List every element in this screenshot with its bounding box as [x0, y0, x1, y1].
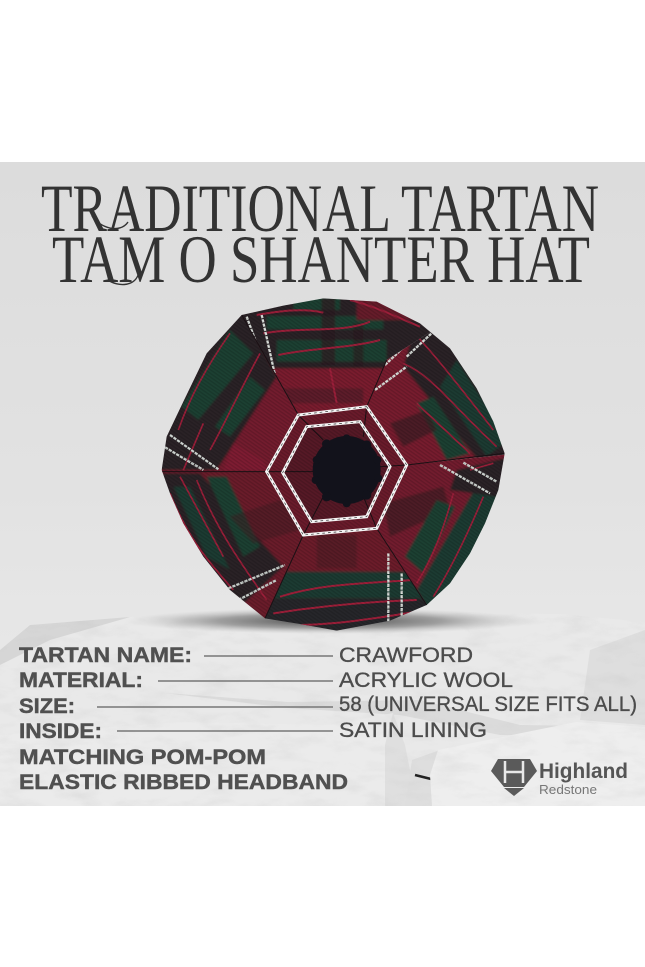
spec: size: 58 (UNIVERSAL SIZE FITS ALL): [339, 693, 637, 716]
panel: right: [368, 332, 505, 464]
panel: upper left: [162, 315, 298, 472]
title: [41, 170, 599, 297]
panel: lower left: [162, 472, 302, 618]
spec list: [19, 644, 637, 794]
infographic canvas: [0, 162, 645, 806]
spec: material: ACRYLIC WOOL: [339, 669, 513, 692]
spec: tartan name: TARTAN NAME:: [19, 644, 192, 667]
hexagon trim: [267, 407, 407, 535]
spec: tartan name: CRAWFORD: [339, 644, 473, 667]
logo: Highland Redstone: Highland: [539, 760, 628, 783]
background panel: [0, 162, 645, 806]
icon: diamond: [491, 759, 537, 796]
feature: pom-pom: MATCHING POM-POM: [19, 746, 266, 769]
spec: size: [19, 693, 637, 718]
panel: bottom: [265, 530, 426, 631]
seams: [162, 315, 504, 618]
logo: Highland Redstone: Redstone: [539, 782, 597, 797]
spec: size: SIZE:: [19, 695, 75, 718]
hat: tartan tam o shanter: [162, 298, 505, 631]
spec: inside: SATIN LINING: [339, 719, 487, 742]
spec: inside: [19, 719, 487, 743]
spec: tartan name: [19, 644, 473, 667]
spec: material: [19, 669, 513, 692]
hat shadow: [125, 608, 535, 634]
panel: top: [242, 298, 430, 414]
logo: Highland Redstone: [491, 759, 628, 797]
feature: headband: ELASTIC RIBBED HEADBAND: [19, 771, 348, 794]
spec: inside: INSIDE:: [19, 720, 102, 743]
spec: material: MATERIAL:: [19, 669, 143, 692]
panel: lower right: [378, 454, 504, 605]
panel: centre crown: [267, 407, 407, 535]
pom-pom: [312, 434, 382, 507]
rocks: [0, 612, 645, 806]
